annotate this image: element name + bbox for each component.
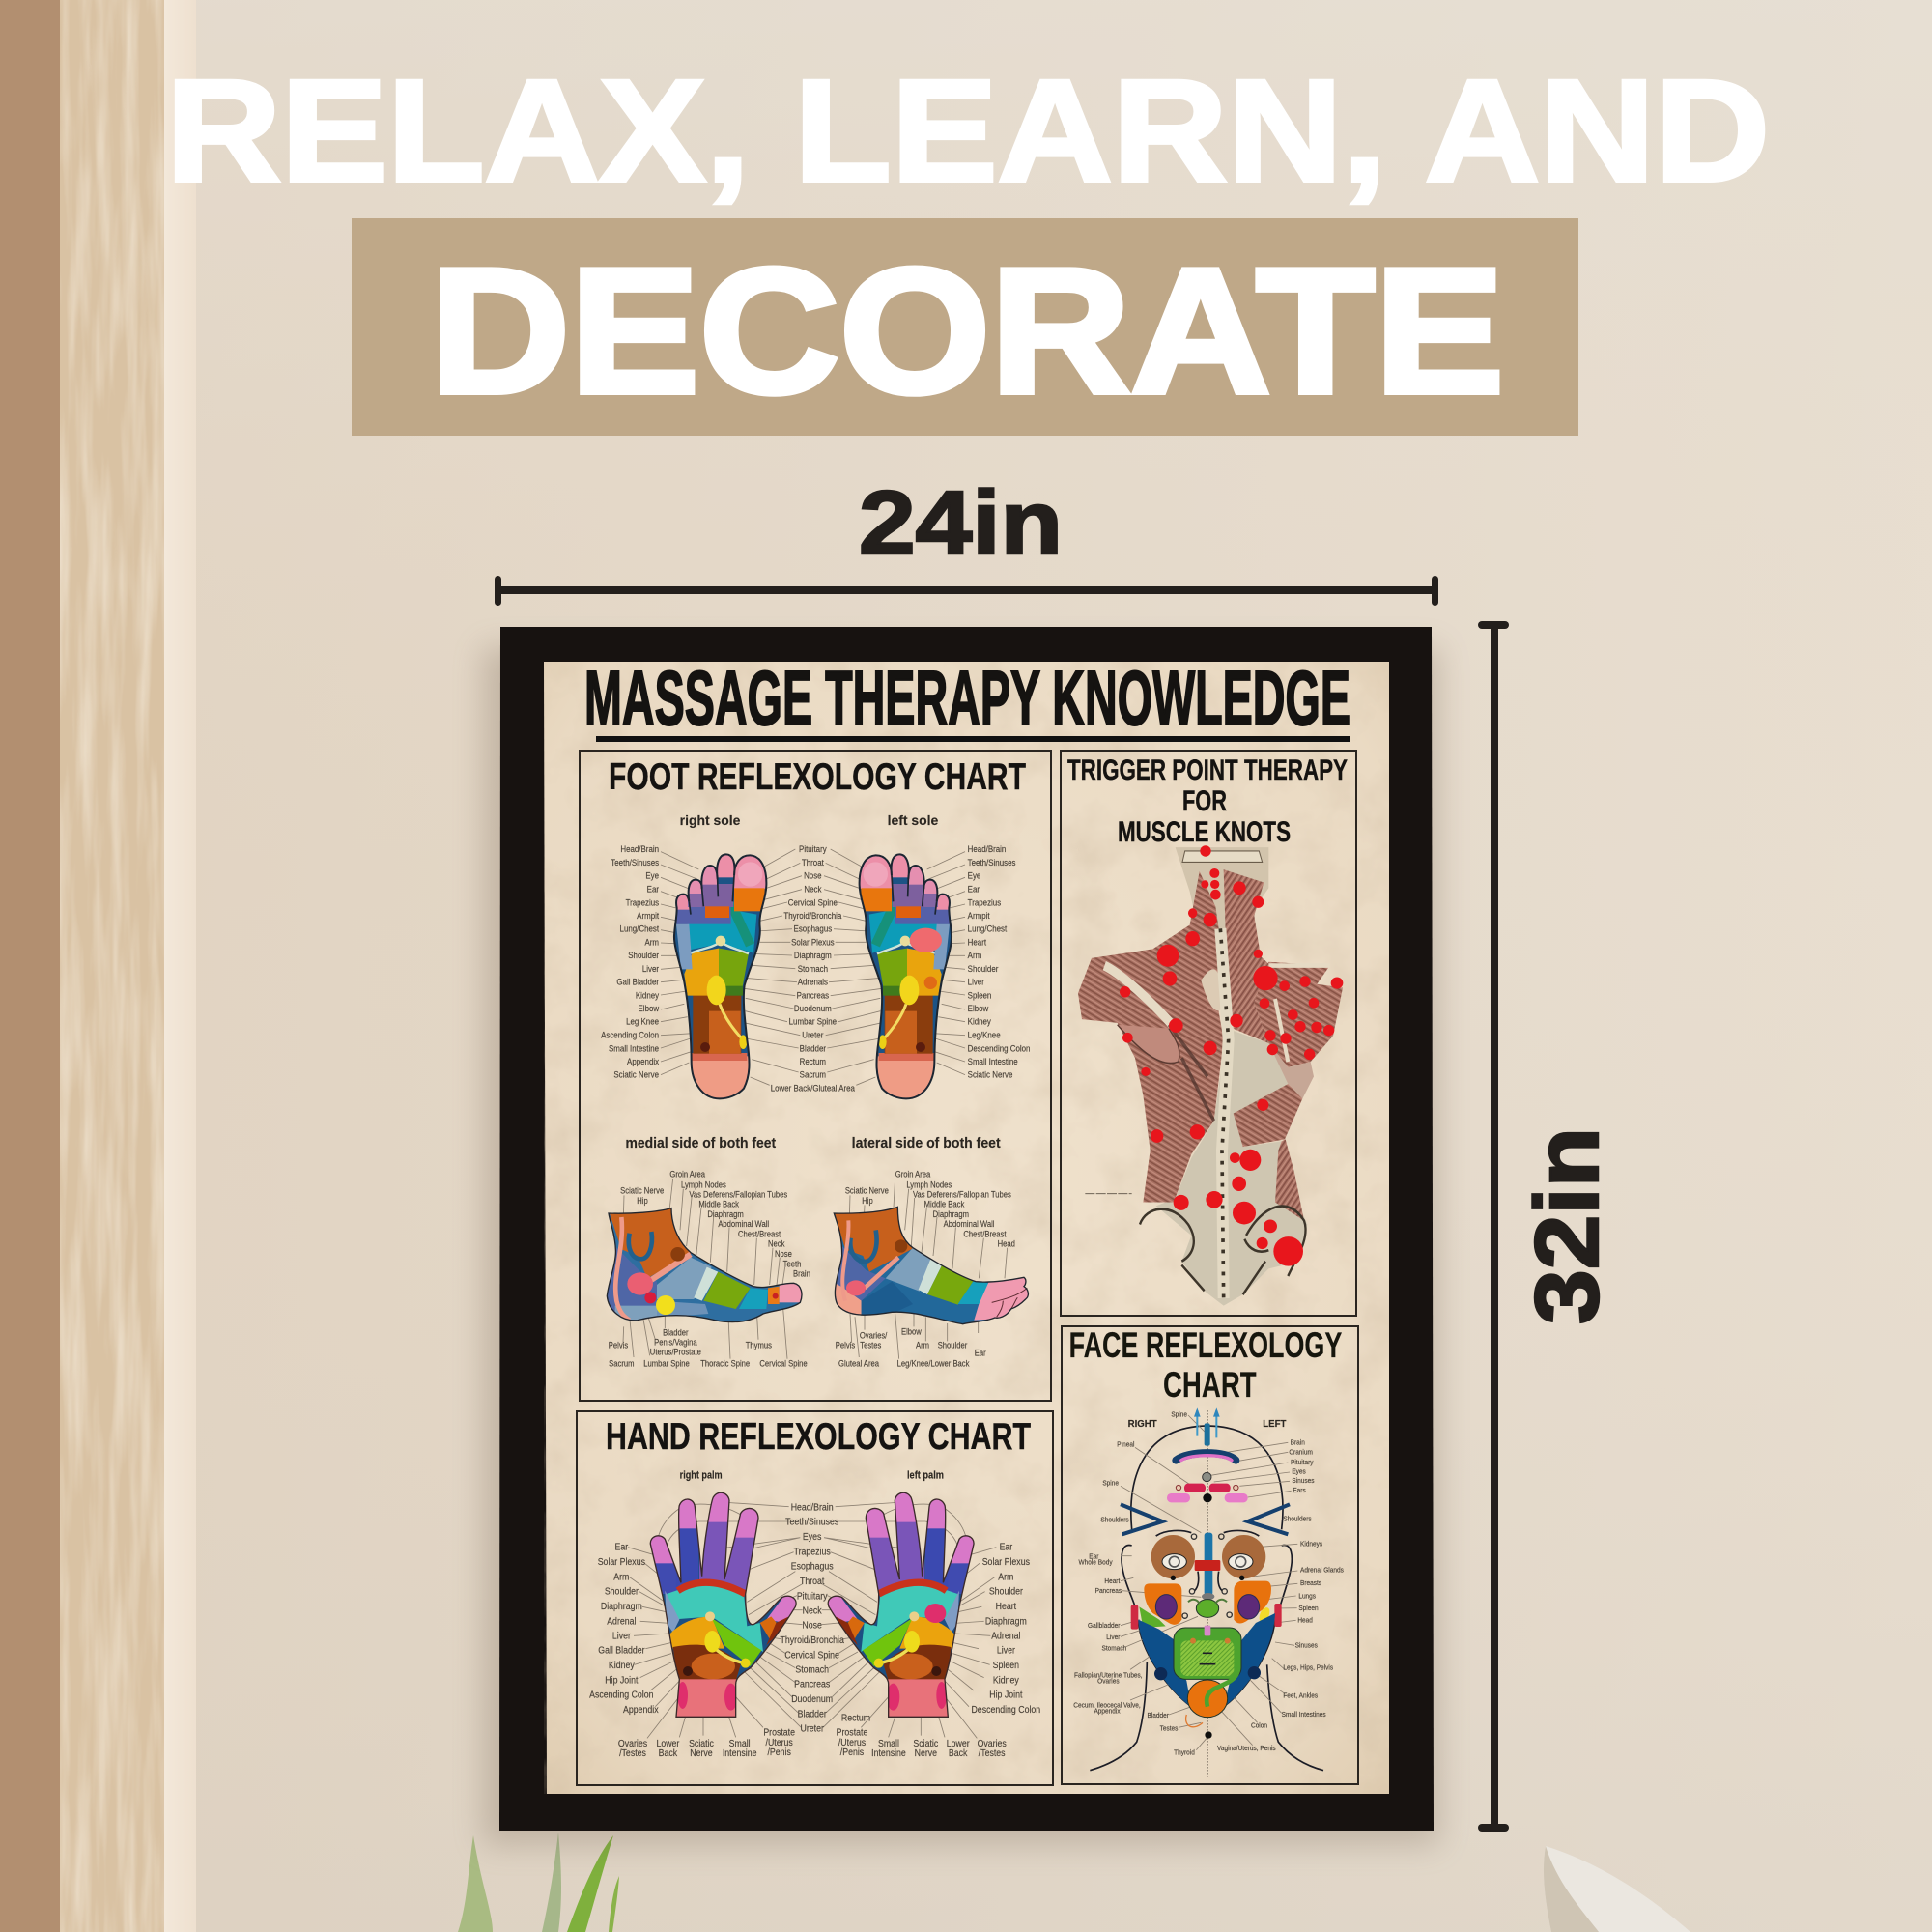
side view headings: lateral side of both feet xyxy=(852,1136,1001,1151)
face labels: Appendix xyxy=(1094,1707,1121,1716)
eye zones xyxy=(1151,1530,1265,1580)
wrist labels: Nerve xyxy=(915,1747,937,1759)
right palm column labels: Spleen xyxy=(993,1660,1019,1671)
face labels: Stomach xyxy=(1101,1644,1126,1652)
face labels: Lungs xyxy=(1298,1592,1316,1600)
right palm column labels: Shoulder xyxy=(989,1586,1024,1598)
lateral foot labels: Head xyxy=(998,1238,1015,1249)
spleen zone xyxy=(924,977,937,989)
face labels: Ovaries xyxy=(1097,1677,1120,1686)
wrist labels: Intensine xyxy=(723,1747,756,1759)
lateral foot labels: Pelvis xyxy=(836,1340,855,1350)
lateral foot labels: Chest/Breast xyxy=(963,1229,1007,1239)
medial foot xyxy=(602,1205,809,1326)
lateral foot labels: Gluteal Area xyxy=(838,1358,879,1368)
face labels: Ears xyxy=(1293,1487,1306,1494)
medial foot labels: Nose xyxy=(775,1248,792,1259)
chin and mouth zone xyxy=(1174,1626,1241,1739)
face labels: Head xyxy=(1297,1616,1313,1624)
width dimension line xyxy=(495,576,1438,606)
right column labels: Spleen xyxy=(968,990,992,1000)
back muscle illustration xyxy=(1078,845,1343,1306)
left palm column labels: Adrenal xyxy=(607,1616,636,1628)
nose bar xyxy=(1195,1533,1222,1600)
wrist labels: Lower xyxy=(947,1738,970,1749)
heart zone xyxy=(910,928,942,952)
medial foot labels: Diaphragm xyxy=(707,1208,744,1219)
face labels: Shoulders xyxy=(1283,1515,1312,1522)
medial foot labels: Groin Area xyxy=(669,1169,705,1179)
center column labels: Throat xyxy=(802,857,824,867)
face labels: Shoulders xyxy=(1100,1516,1129,1524)
right column labels: Heart xyxy=(968,937,987,947)
center palm labels: Cervical Spine xyxy=(784,1650,839,1662)
face labels: Cranium xyxy=(1289,1448,1313,1457)
right palm column labels: Diaphragm xyxy=(985,1616,1027,1628)
face labels: Colon xyxy=(1251,1721,1267,1729)
wrist labels xyxy=(618,1713,1007,1759)
center column labels: Lumbar Spine xyxy=(789,1016,837,1027)
center column labels: Lower Back/Gluteal Area xyxy=(771,1083,855,1093)
center palm labels: Neck xyxy=(803,1605,822,1617)
medial foot labels: Brain xyxy=(793,1268,810,1279)
trigger point markers xyxy=(1120,845,1343,1266)
right palm column labels: Liver xyxy=(997,1645,1016,1657)
sole labels: left sole xyxy=(888,812,939,828)
cheek zones xyxy=(1131,1581,1282,1630)
width label 24in: 24in xyxy=(859,472,1063,573)
face labels: Sinuses xyxy=(1295,1641,1318,1650)
right sole foot xyxy=(661,849,802,1101)
face labels: Vagina/Uterus, Penis xyxy=(1217,1745,1276,1752)
left sole foot xyxy=(824,849,965,1101)
wrist labels: /Uterus xyxy=(838,1737,866,1748)
leader lines xyxy=(1121,1415,1297,1750)
right column labels: Trapezius xyxy=(968,897,1002,907)
height label 32in: 32in xyxy=(1517,1127,1617,1324)
center palm labels: Stomach xyxy=(795,1664,829,1676)
center palm labels: Trapezius xyxy=(794,1547,831,1558)
right column labels: Leg/Knee xyxy=(968,1030,1001,1040)
face labels: Thyroid xyxy=(1174,1748,1195,1756)
left palm xyxy=(822,1491,996,1738)
lateral foot labels: Shoulder xyxy=(938,1340,968,1350)
face labels: Spine xyxy=(1171,1410,1187,1419)
right column labels: Liver xyxy=(968,977,984,987)
left palm column labels: Solar Plexus xyxy=(598,1556,645,1568)
heading: face reflexology xyxy=(1069,1324,1342,1405)
right palm xyxy=(628,1491,803,1738)
left foot column labels: Eye xyxy=(645,870,659,881)
poster title: MASSAGE THERAPY KNOWLEDGE xyxy=(584,655,1350,741)
face labels: Kidneys xyxy=(1300,1540,1323,1548)
right palm column labels: Arm xyxy=(998,1572,1013,1583)
medial foot labels: Lumbar Spine xyxy=(643,1358,690,1368)
left foot column labels: Appendix xyxy=(627,1056,660,1066)
wrist labels: Prostate xyxy=(763,1727,795,1739)
left foot column labels: Sciatic Nerve xyxy=(613,1069,659,1080)
medial foot labels: Vas Deferens/Fallopian Tubes xyxy=(689,1189,787,1199)
lateral foot labels: Leg/Knee/Lower Back xyxy=(897,1358,970,1368)
frame shadow xyxy=(483,647,1439,1845)
poster paper xyxy=(544,662,1389,1794)
wrist labels: Ovaries xyxy=(978,1738,1007,1749)
right column labels xyxy=(968,843,1031,1080)
face labels: Spine xyxy=(1102,1479,1119,1488)
jaw zones xyxy=(1138,1613,1275,1707)
right and left headings: LEFT xyxy=(1263,1419,1286,1430)
lateral foot labels: Elbow xyxy=(901,1326,923,1336)
wrist labels: Small xyxy=(878,1738,899,1749)
panel: foot reflexology chart xyxy=(580,751,1051,1401)
lateral foot labels: Ear xyxy=(975,1348,986,1357)
left palm column labels: Arm xyxy=(613,1572,629,1583)
face labels: Breasts xyxy=(1300,1579,1321,1587)
wrist labels: Rectum xyxy=(841,1713,870,1724)
center column labels: Pituitary xyxy=(799,843,827,854)
right column labels: Elbow xyxy=(968,1003,989,1013)
right column labels: Lung/Chest xyxy=(968,923,1008,934)
medial foot labels: Bladder xyxy=(663,1327,689,1338)
face labels: Legs, Hips, Pelvis xyxy=(1283,1663,1333,1671)
wrist labels: Intensine xyxy=(871,1747,906,1759)
left foot column labels: Teeth/Sinuses xyxy=(611,857,660,867)
lateral foot labels: Testes xyxy=(860,1340,881,1350)
lateral foot labels: Hip xyxy=(862,1195,873,1206)
headline: relax, learn, and: RELAX, LEARN, AND xyxy=(166,49,1770,212)
left palm column labels: Ascending Colon xyxy=(589,1690,653,1701)
lateral foot labels: Lymph Nodes xyxy=(906,1179,952,1189)
lateral foot labels: Groin Area xyxy=(895,1169,931,1179)
leader lines xyxy=(623,1179,1008,1359)
heading: foot reflexology: FOOT REFLEXOLOGY CHART xyxy=(609,756,1026,798)
left foot column labels: Armpit xyxy=(637,910,660,921)
center palm labels: Nose xyxy=(802,1620,822,1632)
medial foot labels: Penis/Vagina xyxy=(654,1337,697,1348)
medial foot labels xyxy=(609,1169,810,1368)
heart zone xyxy=(924,1604,946,1623)
center palm labels: Teeth/Sinuses xyxy=(785,1517,838,1528)
center column labels: Adrenals xyxy=(798,977,829,987)
right column labels: Teeth/Sinuses xyxy=(968,857,1016,867)
center column labels: Rectum xyxy=(800,1056,826,1066)
center palm labels: Thyroid/Bronchia xyxy=(781,1634,844,1646)
wrist labels: /Penis xyxy=(840,1747,864,1758)
right palm column labels: Heart xyxy=(996,1601,1016,1612)
left palm column labels: Appendix xyxy=(623,1704,659,1716)
medial foot labels: Cervical Spine xyxy=(759,1358,808,1368)
medial foot labels: Chest/Breast xyxy=(738,1229,781,1239)
center column labels: Neck xyxy=(804,884,822,894)
lateral foot labels: Middle Back xyxy=(924,1199,965,1208)
heading: trigger point xyxy=(1067,754,1348,848)
lateral foot labels xyxy=(836,1169,1015,1368)
right column labels: Small Intestine xyxy=(968,1056,1018,1066)
center palm labels: Head/Brain xyxy=(791,1502,834,1514)
medial foot labels: Abdominal Wall xyxy=(718,1218,769,1229)
face labels: Brain xyxy=(1291,1438,1305,1446)
medial foot labels: Thymus xyxy=(746,1340,772,1350)
center palm labels: Throat xyxy=(800,1576,825,1587)
center column labels: Diaphragm xyxy=(794,950,832,960)
head outline xyxy=(1090,1426,1323,1771)
wrist labels: Lower xyxy=(656,1738,680,1749)
left palm column labels xyxy=(589,1542,659,1716)
wrist labels: /Testes xyxy=(979,1747,1006,1759)
right column labels: Sciatic Nerve xyxy=(968,1069,1013,1080)
right column labels: Kidney xyxy=(968,1016,992,1027)
wrist labels: Small xyxy=(729,1738,751,1749)
left palm column labels: Hip Joint xyxy=(605,1675,639,1687)
left foot column labels: Gall Bladder xyxy=(616,977,659,987)
heading: trigger point: FOR xyxy=(1182,785,1227,817)
wrist labels: Back xyxy=(949,1747,968,1759)
face labels: Bladder xyxy=(1147,1712,1170,1719)
right column labels: Descending Colon xyxy=(968,1043,1031,1053)
face labels: Small Intestines xyxy=(1282,1711,1326,1719)
lateral foot labels: Arm xyxy=(916,1340,929,1350)
left foot column labels xyxy=(601,843,660,1080)
side view feet diagrams xyxy=(602,1136,1034,1368)
medial foot labels: Uterus/Prostate xyxy=(650,1347,701,1356)
left foot column labels: Shoulder xyxy=(628,950,659,960)
shoulder chevrons xyxy=(1121,1504,1290,1534)
lateral foot labels: Ovaries/ xyxy=(860,1330,888,1340)
medial foot labels: Lymph Nodes xyxy=(681,1179,726,1189)
left foot column labels: Head/Brain xyxy=(620,843,659,854)
left foot column labels: Lung/Chest xyxy=(620,923,660,934)
wrist labels: /Testes xyxy=(619,1747,646,1759)
lateral foot labels: Abdominal Wall xyxy=(944,1218,995,1229)
right palm column labels: Ear xyxy=(1000,1542,1013,1553)
lateral foot labels: Vas Deferens/Fallopian Tubes xyxy=(913,1189,1011,1199)
center column labels: Sacrum xyxy=(800,1069,826,1080)
right column labels: Arm xyxy=(968,950,981,960)
right column labels: Armpit xyxy=(968,910,990,921)
heading: face reflexology: FACE REFLEXOLOGY xyxy=(1069,1324,1342,1365)
wrist labels: Sciatic xyxy=(913,1738,938,1749)
center palm labels: Pancreas xyxy=(794,1679,830,1690)
face labels: Pineal xyxy=(1117,1440,1135,1448)
palm labels xyxy=(680,1469,944,1481)
medial foot labels: Neck xyxy=(768,1238,785,1249)
face labels: Gallbladder xyxy=(1088,1622,1121,1630)
headline band: decorate: DECORATE xyxy=(430,231,1504,430)
right palm column labels: Kidney xyxy=(993,1675,1019,1687)
sole labels: right sole xyxy=(680,812,741,828)
right column labels: Eye xyxy=(968,870,980,881)
center palm labels: Eyes xyxy=(803,1531,822,1543)
nose green zone xyxy=(1182,1589,1232,1618)
left foot column labels: Ascending Colon xyxy=(601,1030,659,1040)
right and left headings xyxy=(1128,1419,1286,1430)
left palm column labels: Kidney xyxy=(609,1660,635,1671)
lateral foot labels: Diaphragm xyxy=(933,1208,969,1219)
face labels: Liver xyxy=(1106,1634,1121,1641)
left foot column labels: Elbow xyxy=(639,1003,660,1013)
face labels: Pancreas xyxy=(1095,1587,1122,1595)
face labels xyxy=(1073,1410,1344,1756)
center palm labels: Pituitary xyxy=(797,1591,828,1603)
medial foot labels: Teeth xyxy=(783,1259,802,1268)
face labels: Sinuses xyxy=(1292,1477,1315,1485)
left palm column labels: Diaphragm xyxy=(601,1601,642,1612)
left palm column labels: Gall Bladder xyxy=(598,1645,645,1657)
face labels: Ear xyxy=(1089,1552,1099,1560)
center column labels: Nose xyxy=(804,870,822,881)
center palm labels xyxy=(781,1502,844,1735)
title underline xyxy=(596,736,1350,742)
face labels: Pituitary xyxy=(1291,1459,1314,1466)
palm labels: left palm xyxy=(907,1469,944,1481)
right column labels: Shoulder xyxy=(968,963,999,974)
center column labels: Cervical Spine xyxy=(788,897,838,907)
wrist labels: Prostate xyxy=(837,1727,867,1739)
palm diagrams xyxy=(589,1469,1040,1759)
right palm column labels: Hip Joint xyxy=(989,1690,1023,1701)
center column labels: Stomach xyxy=(798,963,828,974)
panel: hand reflexology chart xyxy=(577,1411,1053,1785)
wrist labels: Nerve xyxy=(690,1747,713,1759)
center palm labels: Ureter xyxy=(801,1723,825,1735)
face labels: Whole Body xyxy=(1078,1558,1113,1567)
palm labels: right palm xyxy=(680,1469,723,1481)
center column labels: Pancreas xyxy=(797,990,830,1000)
right palm column labels: Adrenal xyxy=(991,1631,1020,1642)
forehead zones xyxy=(1167,1407,1248,1502)
heading: hand reflexology: HAND REFLEXOLOGY CHART xyxy=(606,1416,1031,1458)
plant leaves xyxy=(458,1833,619,1932)
face labels: Adrenal Glands xyxy=(1300,1566,1344,1575)
face labels: Testes xyxy=(1160,1724,1179,1733)
center column labels: Bladder xyxy=(800,1043,826,1053)
face labels: Fallopian/Uterine Tubes, xyxy=(1074,1671,1143,1680)
center column labels: Ureter xyxy=(802,1030,823,1040)
face labels: Eyes xyxy=(1292,1467,1306,1475)
left palm column labels: Liver xyxy=(612,1631,632,1642)
right column labels: Head/Brain xyxy=(968,843,1006,854)
right palm column labels xyxy=(971,1542,1040,1716)
lateral foot xyxy=(831,1205,1034,1326)
right column labels: Ear xyxy=(968,884,980,894)
left foot column labels: Arm xyxy=(644,937,659,947)
center column labels: Solar Plexus xyxy=(791,937,835,947)
left foot column labels: Leg Knee xyxy=(626,1016,659,1027)
wrist labels: /Penis xyxy=(767,1747,791,1758)
left foot column labels: Ear xyxy=(647,884,659,894)
left foot column labels: Kidney xyxy=(636,990,660,1000)
center column labels: Duodenum xyxy=(794,1003,832,1013)
height dimension line xyxy=(1478,621,1509,1832)
white cushion corner xyxy=(1544,1846,1690,1932)
side view headings xyxy=(625,1136,1001,1151)
left palm column labels: Ear xyxy=(615,1542,629,1553)
sole labels xyxy=(680,812,939,828)
medial foot labels: Sciatic Nerve xyxy=(620,1185,665,1195)
medial foot labels: Sacrum xyxy=(609,1358,635,1368)
heading: face reflexology: CHART xyxy=(1163,1364,1257,1405)
medial foot labels: Middle Back xyxy=(698,1199,740,1208)
right palm column labels: Solar Plexus xyxy=(982,1556,1030,1568)
face labels: Cecum, Ileocecal Valve, xyxy=(1073,1701,1141,1709)
face labels: Heart xyxy=(1104,1577,1120,1585)
left foot column labels: Liver xyxy=(642,963,659,974)
panel: face reflexology chart xyxy=(1062,1324,1358,1784)
wrist labels: /Uterus xyxy=(766,1737,793,1748)
face labels: Spleen xyxy=(1298,1605,1319,1612)
panel: trigger point therapy xyxy=(1061,751,1356,1316)
wrist labels: Sciatic xyxy=(689,1738,714,1749)
center palm labels: Esophagus xyxy=(791,1561,834,1573)
medial foot labels: Thoracic Spine xyxy=(700,1358,751,1368)
right palm column labels: Descending Colon xyxy=(971,1704,1040,1716)
side view headings: medial side of both feet xyxy=(625,1136,776,1151)
foot soles diagrams xyxy=(601,812,1031,1101)
medial foot labels: Hip xyxy=(637,1195,648,1206)
center column labels xyxy=(771,843,855,1093)
center palm labels: Bladder xyxy=(798,1709,828,1720)
right and left headings: RIGHT xyxy=(1128,1419,1157,1430)
poster frame xyxy=(499,627,1434,1831)
face drawing and labels xyxy=(1069,1324,1344,1777)
face labels: Feet, Ankles xyxy=(1283,1691,1319,1700)
wrist labels: Back xyxy=(659,1747,677,1759)
center palm labels: Duodenum xyxy=(791,1693,833,1705)
wooden door frame at left xyxy=(0,0,196,1932)
medial foot labels: Pelvis xyxy=(609,1340,628,1350)
left foot column labels: Trapezius xyxy=(626,897,660,907)
heading: trigger point: TRIGGER POINT THERAPY xyxy=(1067,754,1348,786)
heading: trigger point: MUSCLE KNOTS xyxy=(1118,816,1291,848)
lateral foot labels: Sciatic Nerve xyxy=(845,1185,889,1195)
left foot column labels: Small Intestine xyxy=(609,1043,659,1053)
center column labels: Esophagus xyxy=(794,923,833,934)
wrist labels: Ovaries xyxy=(618,1738,647,1749)
center column labels: Thyroid/Bronchia xyxy=(783,910,841,921)
left palm column labels: Shoulder xyxy=(605,1586,639,1598)
